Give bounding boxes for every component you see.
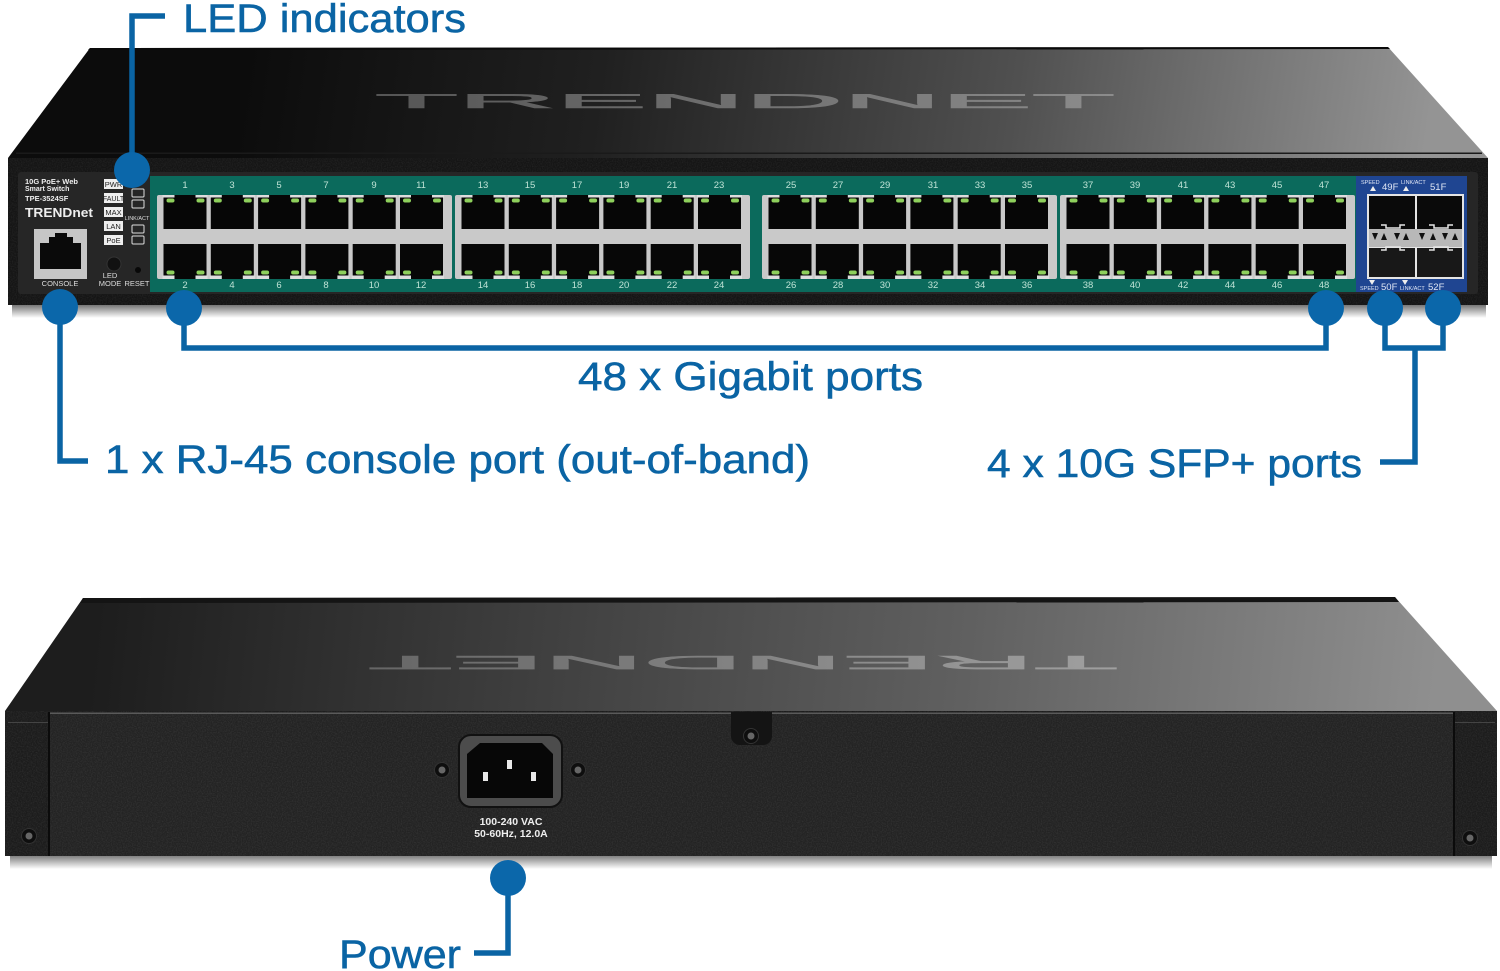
port numbers: 1 [182, 180, 188, 191]
port numbers: 28 [833, 280, 843, 291]
front face [8, 158, 1488, 305]
port numbers: 47 [1319, 180, 1329, 191]
front inner panel [18, 172, 1478, 294]
front switch unit [8, 47, 1488, 318]
port numbers: 33 [975, 180, 985, 191]
port numbers: 41 [1178, 180, 1188, 191]
port numbers: 21 [667, 180, 677, 191]
LED labels: LINK/ACT [125, 216, 150, 222]
port numbers: 11 [416, 180, 426, 191]
mirrored brand on top surface: TRENDNET [365, 651, 1118, 672]
rear switch unit [5, 597, 1497, 869]
port numbers: 34 [975, 280, 985, 291]
port numbers: 16 [525, 280, 535, 291]
port numbers: 24 [714, 280, 724, 291]
port numbers: 13 [478, 180, 488, 191]
port numbers: 26 [786, 280, 796, 291]
left control panel [25, 177, 150, 288]
power inlet [459, 735, 562, 807]
LED labels: MAX [105, 208, 122, 217]
port numbers: 32 [928, 280, 938, 291]
mode and reset buttons [99, 257, 150, 288]
LED labels: FAULT [103, 196, 125, 203]
port numbers: 35 [1022, 180, 1032, 191]
model text [25, 177, 78, 203]
callout: SFP+ ports: 4 x 10G SFP+ ports [987, 442, 1362, 486]
callout: SFP+ ports [987, 290, 1461, 486]
power rating [474, 816, 548, 840]
port numbers: 5 [276, 180, 282, 191]
port numbers: 42 [1178, 280, 1188, 291]
RJ-45 port block 2 [455, 195, 750, 279]
rear face [5, 711, 1497, 856]
port numbers: 36 [1022, 280, 1032, 291]
port numbers: 4 [229, 280, 235, 291]
RJ-45 port block 3 [762, 195, 1057, 279]
screws [22, 712, 1478, 846]
shadow under rear unit [10, 855, 1492, 869]
port numbers: 30 [880, 280, 890, 291]
port numbers: 8 [323, 280, 329, 291]
LED labels: PoE [106, 236, 121, 245]
SFP panel [1356, 176, 1467, 293]
callout: console port: 1 x RJ-45 console port (out-of-band) [105, 438, 810, 482]
port numbers: 40 [1130, 280, 1140, 291]
LED labels [103, 179, 150, 245]
port numbers: 39 [1130, 180, 1140, 191]
port numbers [182, 180, 1329, 291]
port numbers: 15 [525, 180, 535, 191]
port numbers: 14 [478, 280, 488, 291]
port numbers: 48 [1319, 280, 1329, 291]
port numbers: 37 [1083, 180, 1093, 191]
brand label: TRENDnet [25, 205, 94, 220]
SFP panel: 49F [1382, 182, 1399, 193]
port numbers: 2 [182, 280, 188, 291]
model text: 10G PoE+ Web [25, 177, 78, 186]
LED labels: LAN [106, 222, 121, 231]
SFP cage latches [1381, 225, 1453, 250]
port numbers: 23 [714, 180, 724, 191]
port numbers: 27 [833, 180, 843, 191]
SFP panel: LINK/ACT [1401, 180, 1426, 186]
SFP panel: SPEED [1361, 180, 1380, 186]
port numbers: 43 [1225, 180, 1235, 191]
port numbers: 3 [229, 180, 235, 191]
port numbers: 19 [619, 180, 629, 191]
SFP panel: 50F [1381, 282, 1398, 293]
rear top surface [5, 597, 1497, 711]
port numbers: 7 [323, 180, 329, 191]
callout: Gigabit ports [166, 290, 1344, 399]
port numbers: 18 [572, 280, 582, 291]
SFP LED markers [1369, 186, 1409, 285]
callout: Power [339, 860, 526, 971]
callout: Gigabit ports: 48 x Gigabit ports [578, 355, 923, 399]
rear inner panel [50, 714, 1453, 856]
model text: Smart Switch [25, 186, 69, 193]
port numbers: 46 [1272, 280, 1282, 291]
port numbers: 20 [619, 280, 629, 291]
port numbers: 12 [416, 280, 426, 291]
port numbers: 25 [786, 180, 796, 191]
port numbers: 22 [667, 280, 677, 291]
mode and reset buttons: LED [103, 271, 118, 280]
green port panel [150, 176, 1356, 292]
mode and reset buttons: RESET [124, 279, 150, 288]
port numbers: 17 [572, 180, 582, 191]
console port: CONSOLE [42, 279, 78, 288]
LED labels: PWR [105, 180, 123, 189]
power rating: 50-60Hz, 12.0A [474, 828, 548, 840]
brand on top surface: TRENDNET [375, 91, 1115, 113]
callout: LED indicators [114, 0, 466, 188]
SFP panel: LINK/ACT [1400, 286, 1425, 292]
callout: console port [42, 289, 810, 482]
port numbers: 6 [276, 280, 282, 291]
RJ-45 port block 1 [157, 195, 452, 279]
SFP direction triangles [1372, 233, 1458, 240]
SFP panel: 51F [1430, 182, 1447, 193]
RJ-45 port block 4 [1060, 195, 1355, 279]
power rating: 100-240 VAC [480, 816, 543, 828]
port numbers: 10 [369, 280, 379, 291]
port numbers: 44 [1225, 280, 1235, 291]
port numbers: 45 [1272, 180, 1282, 191]
port numbers: 31 [928, 180, 938, 191]
mode and reset buttons: MODE [99, 279, 121, 288]
port numbers: 9 [371, 180, 377, 191]
port numbers: 29 [880, 180, 890, 191]
SFP panel: 52F [1428, 282, 1445, 293]
model text: TPE-3524SF [25, 194, 69, 203]
shadow under front unit [12, 305, 1486, 318]
LED port glyphs [132, 189, 144, 244]
SFP panel: SPEED [1360, 286, 1379, 292]
top surface of switch [8, 47, 1488, 158]
port numbers: 38 [1083, 280, 1093, 291]
